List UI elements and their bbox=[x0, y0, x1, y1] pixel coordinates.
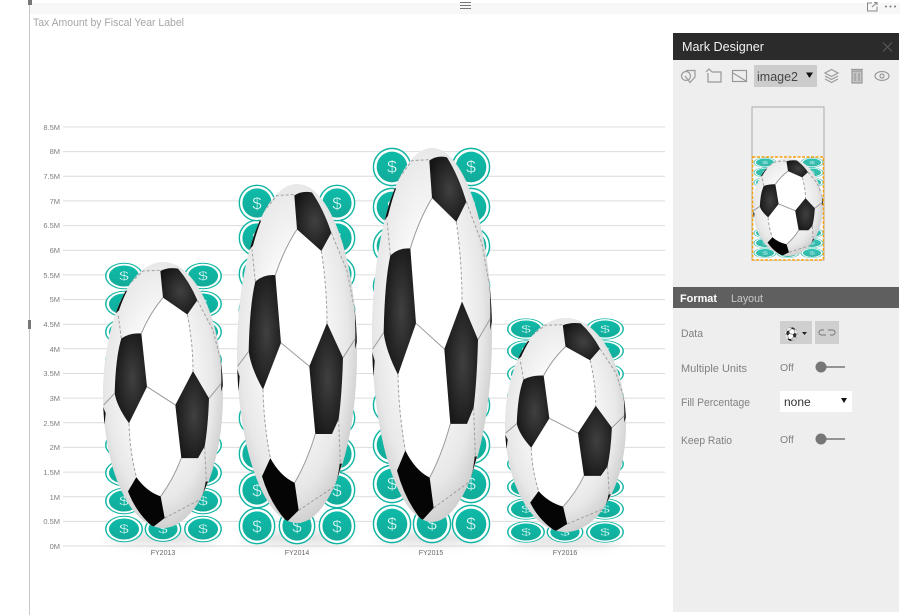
x axis labels: FY2016 bbox=[553, 550, 577, 557]
row: Multiple Units bbox=[681, 362, 845, 375]
y axis labels: 0.5M bbox=[43, 517, 60, 526]
column: FY2015 bbox=[371, 148, 493, 544]
y axis labels: 6M bbox=[50, 246, 60, 255]
y axis labels: 0M bbox=[50, 542, 60, 551]
more options icon bbox=[885, 6, 896, 8]
panel header bbox=[673, 33, 899, 60]
top strip bbox=[30, 3, 900, 14]
icon: layers bbox=[825, 70, 838, 82]
icon: text frame bbox=[706, 69, 721, 82]
y axis labels: 3M bbox=[50, 394, 60, 403]
column: FY2013 bbox=[102, 262, 224, 544]
row: Keep Ratio: Off bbox=[780, 434, 794, 446]
x axis labels bbox=[151, 550, 577, 557]
y axis labels bbox=[43, 123, 60, 551]
x axis labels: FY2013 bbox=[151, 550, 175, 557]
panel header: Mark Designer bbox=[682, 40, 764, 54]
y axis labels: 4M bbox=[50, 345, 60, 354]
icon: eye bbox=[875, 72, 889, 80]
y axis labels: 2M bbox=[50, 443, 60, 452]
y axis labels: 1M bbox=[50, 493, 60, 502]
coin stack FY2015 bbox=[373, 148, 490, 544]
y axis labels: 3.5M bbox=[43, 369, 60, 378]
y axis labels: 5.5M bbox=[43, 271, 60, 280]
dropdown: image2: image2 bbox=[757, 70, 798, 84]
icon: image bbox=[732, 70, 746, 82]
row: Multiple Units: Multiple Units bbox=[681, 363, 747, 375]
coin stack FY2014 bbox=[239, 185, 355, 544]
mark preview bbox=[752, 107, 824, 260]
icon: shapes bbox=[682, 70, 695, 82]
toolbar bbox=[682, 65, 889, 87]
column: FY2014 bbox=[236, 184, 358, 544]
preview soccer ball bbox=[753, 158, 823, 256]
x axis labels: FY2015 bbox=[419, 550, 443, 557]
coin stack FY2016 bbox=[508, 319, 623, 546]
y axis labels: 6.5M bbox=[43, 221, 60, 230]
panel: Mark Designer bbox=[673, 33, 899, 612]
row: Multiple Units: Off bbox=[780, 362, 794, 374]
chart title: Tax Amount by Fiscal Year Label bbox=[33, 17, 184, 29]
chart: tax amount by fiscal year bbox=[43, 123, 665, 557]
tab bar: Format bbox=[680, 293, 717, 305]
y axis labels: 4.5M bbox=[43, 320, 60, 329]
tab bar bbox=[673, 287, 899, 308]
row: Fill Percentage: Fill Percentage bbox=[681, 397, 750, 409]
y axis labels: 8M bbox=[50, 147, 60, 156]
tab bar: Layout bbox=[731, 293, 763, 305]
column: FY2016 bbox=[504, 318, 627, 546]
y axis labels: 7M bbox=[50, 197, 60, 206]
row: Fill Percentage: none bbox=[784, 395, 811, 409]
resize handles bbox=[28, 0, 32, 329]
row: Data: Data bbox=[681, 328, 704, 340]
gridlines bbox=[63, 127, 665, 546]
y axis labels: 8.5M bbox=[43, 123, 60, 132]
drag handle icon bbox=[460, 2, 471, 8]
preview selection outline bbox=[752, 157, 824, 260]
preview image area bbox=[752, 157, 824, 260]
y axis labels: 5M bbox=[50, 295, 60, 304]
x axis labels: FY2014 bbox=[285, 550, 309, 557]
y axis labels: 7.5M bbox=[43, 172, 60, 181]
focus mode icon bbox=[868, 2, 877, 11]
visual left border bbox=[29, 0, 30, 615]
row: Fill Percentage bbox=[681, 391, 852, 412]
soccer ball FY2013 bbox=[102, 262, 224, 528]
soccer ball FY2016 bbox=[504, 318, 627, 532]
y axis labels: 1.5M bbox=[43, 468, 60, 477]
coin stack FY2013 bbox=[106, 263, 221, 544]
row: Data bbox=[681, 321, 839, 344]
dropdown: image2 bbox=[754, 65, 817, 87]
icon: trash bbox=[851, 70, 863, 83]
soccer ball FY2015 bbox=[371, 148, 493, 522]
row: Keep Ratio bbox=[681, 434, 845, 447]
y axis labels: 2.5M bbox=[43, 419, 60, 428]
preview coins bbox=[754, 158, 823, 258]
soccer ball FY2014 bbox=[236, 184, 358, 523]
row: Keep Ratio: Keep Ratio bbox=[681, 435, 732, 447]
